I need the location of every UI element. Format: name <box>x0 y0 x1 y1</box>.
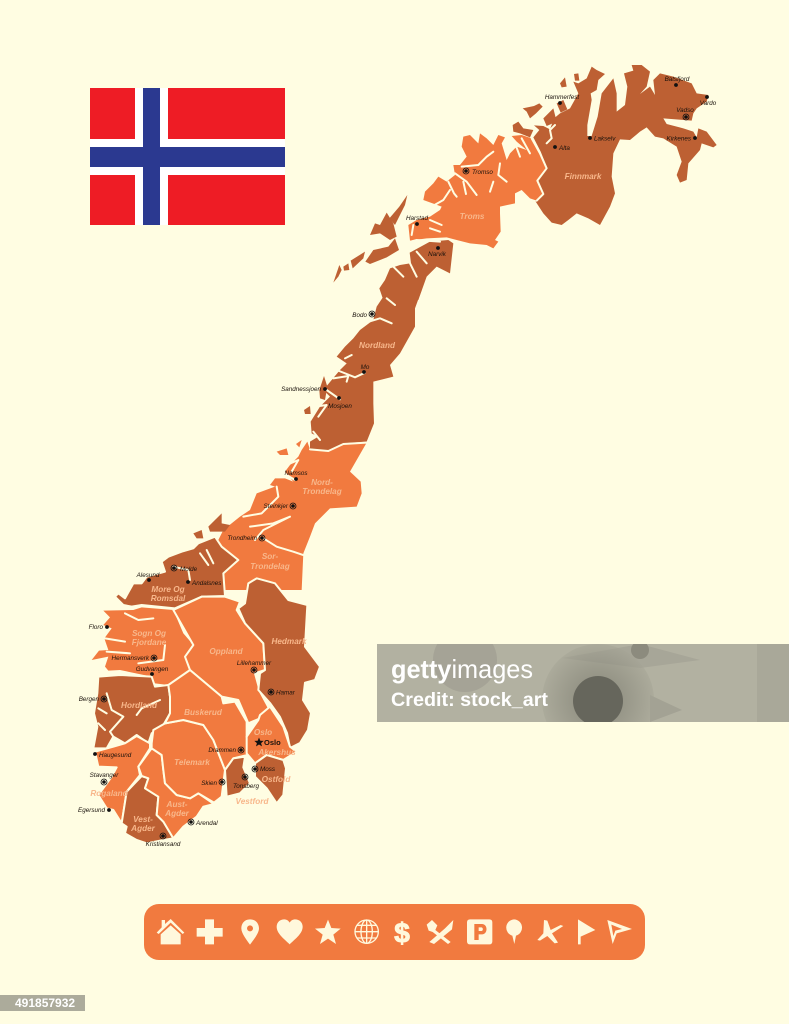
city names: Hammerfest <box>545 94 579 101</box>
map of Norway <box>78 65 717 848</box>
city names: Egersund <box>78 807 105 814</box>
region names: Romsdal <box>151 594 186 603</box>
region: Rogaland <box>95 736 150 823</box>
region names: Akershus <box>257 748 296 757</box>
region names: Sor- <box>262 552 278 561</box>
icon: airplane <box>537 920 563 943</box>
region: Oppland <box>173 597 272 723</box>
icon: fork and knife <box>427 920 453 944</box>
flag of Norway <box>90 88 285 225</box>
region: Nord-Trondelag and Sor-Trondelag <box>213 440 367 590</box>
region names: More Og <box>151 585 185 594</box>
city names: Trondheim <box>227 535 257 542</box>
city names: Harstad <box>406 215 429 222</box>
region: More Og Romsdal <box>115 513 238 608</box>
city names: Drammen <box>208 747 236 754</box>
city names: Narvik <box>428 251 447 258</box>
city names: Moss <box>260 766 276 773</box>
city names: Steinkjer <box>264 503 289 510</box>
city names: Tromso <box>472 169 493 176</box>
icon: map tack <box>506 919 522 944</box>
region names: Troms <box>460 212 485 221</box>
region names: Agder <box>130 824 156 833</box>
city markers <box>93 83 709 839</box>
region names <box>90 172 602 833</box>
region: Oslo and Akershus <box>247 707 297 763</box>
region names: Ostfold <box>262 775 291 784</box>
region names: Nordland <box>359 341 396 350</box>
city names: Lakselv <box>594 136 616 142</box>
region names: Trondelag <box>250 562 290 571</box>
region names: Nord- <box>311 478 333 487</box>
icon: home <box>157 919 184 944</box>
region: Vestfold <box>225 757 250 797</box>
region: Nordland south <box>304 290 422 451</box>
city names: Bodo <box>352 312 367 319</box>
region: Ostfold <box>255 755 286 803</box>
icon: globe <box>355 920 378 943</box>
region: Hedmark <box>238 578 320 748</box>
city names: Arendal <box>195 820 218 827</box>
city names: Bergen <box>79 696 99 703</box>
city names: Haugesund <box>99 752 132 759</box>
image id tag <box>0 995 85 1011</box>
city names: Andalsnes <box>191 580 222 587</box>
region names: Vestford <box>236 797 269 806</box>
region names: Trondelag <box>302 487 342 496</box>
region names: Vest- <box>133 815 153 824</box>
watermark panel <box>377 644 789 722</box>
region names: Sogn Og <box>132 629 166 638</box>
region names: Oppland <box>209 647 244 656</box>
city names: Alta <box>558 145 570 152</box>
region: Sogn Og Fjordane <box>92 607 193 685</box>
region: Nordland north <box>333 195 453 300</box>
city names: Floro <box>89 624 103 631</box>
region: Buskerud <box>165 670 252 770</box>
city names: Tonsberg <box>233 783 260 790</box>
region names: Agder <box>164 809 190 818</box>
city names: Kirkenes <box>666 136 692 142</box>
icon: parking <box>467 919 492 944</box>
city names: Gudvangen <box>136 666 169 673</box>
city names: Oslo <box>264 738 281 747</box>
region: Hordaland <box>93 675 170 748</box>
watermark panel: Credit: stock_art <box>391 690 549 711</box>
icon: location pin <box>241 919 259 945</box>
city names: Kristiansand <box>146 841 181 848</box>
region: Aust-Agder <box>138 748 214 838</box>
region names: Buskerud <box>184 708 223 717</box>
city names: Lillehammer <box>237 660 272 667</box>
city names: Hermansverk <box>112 655 150 662</box>
icon: star <box>315 920 341 944</box>
city names: Sandnessjoen <box>281 386 321 393</box>
region names: Finnmark <box>565 172 602 181</box>
region names: Hedmark <box>271 637 307 646</box>
region names: Oslo <box>254 728 272 737</box>
city names: Vardo <box>700 100 717 107</box>
city names: Batsfjord <box>665 76 690 83</box>
region names: Telemark <box>174 758 210 767</box>
icon: navigation arrow <box>607 920 632 944</box>
region names: Hordland <box>121 701 158 710</box>
city names: Molde <box>180 566 198 573</box>
region: Vest-Agder <box>122 776 173 843</box>
icon: medical cross <box>197 919 223 944</box>
icon: flag <box>578 919 595 944</box>
region names: Aust- <box>166 800 188 809</box>
city names <box>78 76 717 848</box>
icon bar <box>144 904 645 960</box>
city names: Alesund <box>136 572 160 579</box>
city names: Skien <box>201 780 217 787</box>
icon: dollar: $ <box>394 918 410 949</box>
city names: Stavanger <box>90 772 119 779</box>
city names: Mo <box>361 364 370 371</box>
region names: Fjordane <box>132 638 167 647</box>
city names: Hamar <box>276 690 296 696</box>
icon: heart <box>277 919 303 944</box>
image id tag: 491857932 <box>15 996 75 1010</box>
region: Finnmark <box>513 65 717 225</box>
city names: Mosjoen <box>328 403 352 410</box>
region: Telemark <box>152 720 225 803</box>
region: Troms <box>408 133 547 248</box>
region names: Rogaland <box>90 789 129 798</box>
city names: Vadso <box>676 107 694 114</box>
watermark panel: gettyimages <box>391 654 533 684</box>
city names: Namsos <box>284 470 308 477</box>
